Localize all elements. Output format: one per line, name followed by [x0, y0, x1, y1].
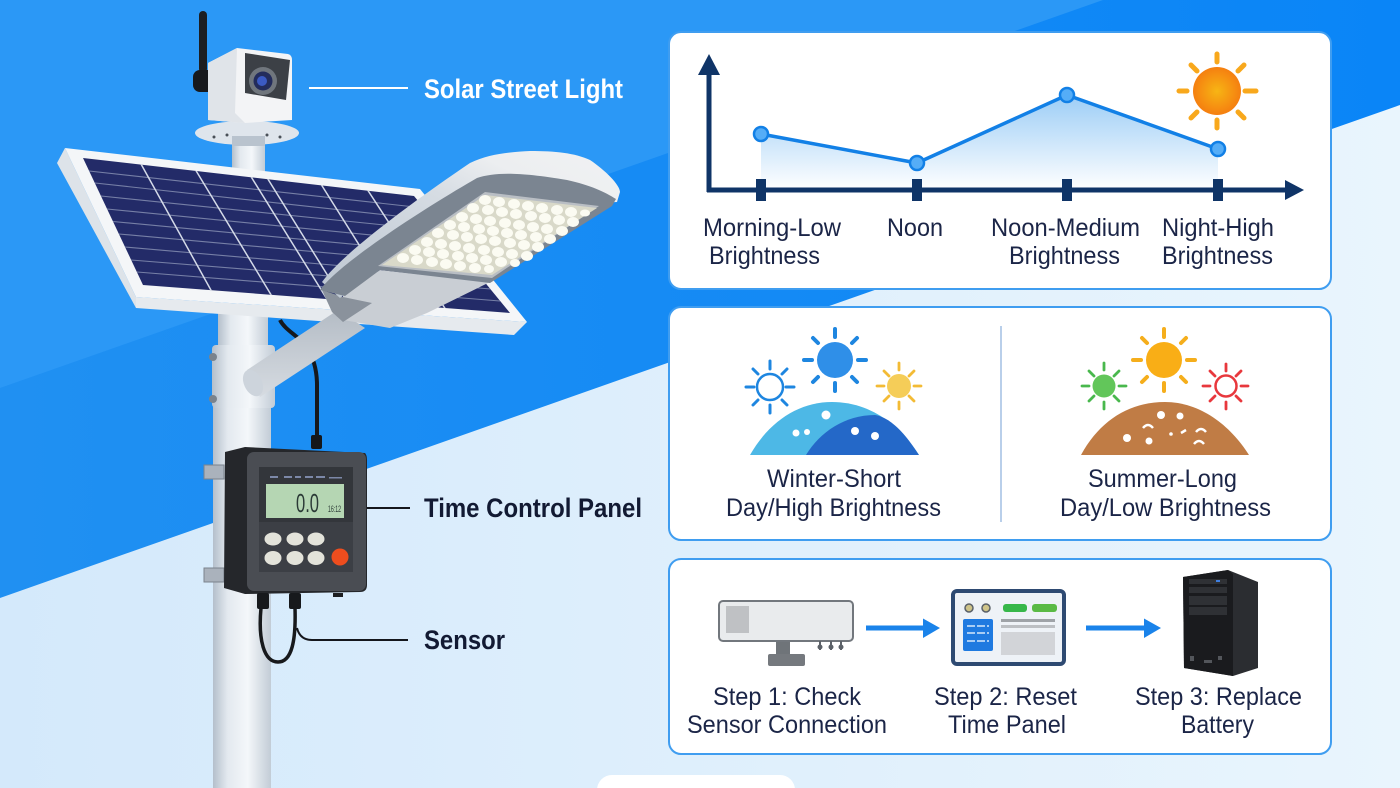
callout: sensor	[297, 625, 505, 655]
icon: winter suns and hill	[746, 329, 921, 455]
step labels	[687, 683, 1302, 739]
axes	[698, 54, 1304, 201]
lcd screen	[266, 484, 344, 518]
cable to control box	[280, 320, 317, 447]
summer label	[1060, 465, 1271, 522]
keypad buttons	[264, 532, 324, 565]
panel: daily brightness chart	[669, 32, 1331, 289]
antenna	[193, 11, 217, 92]
winter label: Day/High Brightness	[726, 494, 941, 522]
panel: seasons	[669, 307, 1331, 540]
callout: time control panel: Time Control Panel	[424, 493, 642, 523]
step labels: Time Panel	[948, 711, 1066, 739]
callout: sensor: Sensor	[424, 625, 505, 655]
chart labels: Brightness	[1009, 242, 1120, 270]
grey band	[320, 174, 616, 296]
icon: time panel	[953, 591, 1064, 664]
line chart	[698, 54, 1304, 201]
arrow	[866, 618, 940, 638]
bottom white tab	[597, 775, 795, 788]
summer label: Day/Low Brightness	[1060, 494, 1271, 522]
step labels: Step 2: Reset	[934, 683, 1077, 711]
crown	[322, 151, 620, 298]
solar panel	[57, 148, 527, 335]
street light pole	[209, 135, 275, 788]
callout: solar street light: Solar Street Light	[424, 74, 623, 104]
step labels: Step 1: Check	[713, 683, 861, 711]
winter label	[726, 465, 941, 522]
brackets	[204, 465, 224, 582]
camera with antenna	[193, 11, 299, 146]
icon: battery tower	[1183, 570, 1258, 676]
icon: sensor device	[719, 601, 853, 666]
chart labels: Brightness	[709, 242, 820, 270]
chart labels: Brightness	[1162, 242, 1273, 270]
step labels: Sensor Connection	[687, 711, 887, 739]
chart labels: Noon	[887, 214, 943, 242]
time control panel box	[204, 435, 367, 597]
lower body	[343, 270, 490, 328]
lcd screen: 0.0	[296, 488, 319, 518]
chart labels	[703, 214, 1274, 270]
icon: sun	[1179, 54, 1256, 128]
panel: troubleshooting steps	[669, 559, 1331, 754]
winter label: Winter-Short	[767, 465, 901, 493]
step labels: Battery	[1181, 711, 1254, 739]
lamp arm	[239, 310, 365, 399]
step labels: Step 3: Replace	[1135, 683, 1302, 711]
chart labels: Morning-Low	[703, 214, 842, 242]
summer label: Summer-Long	[1088, 465, 1237, 493]
red button	[332, 548, 348, 566]
led array	[382, 195, 597, 275]
chart labels: Night-High	[1162, 214, 1274, 242]
chart labels: Noon-Medium	[991, 214, 1140, 242]
street lamp head	[239, 151, 620, 399]
lcd screen: 16:12	[328, 504, 341, 514]
icon: summer suns and hill	[1081, 329, 1249, 455]
arrow	[1086, 618, 1161, 638]
sensor cable loop	[257, 593, 301, 662]
